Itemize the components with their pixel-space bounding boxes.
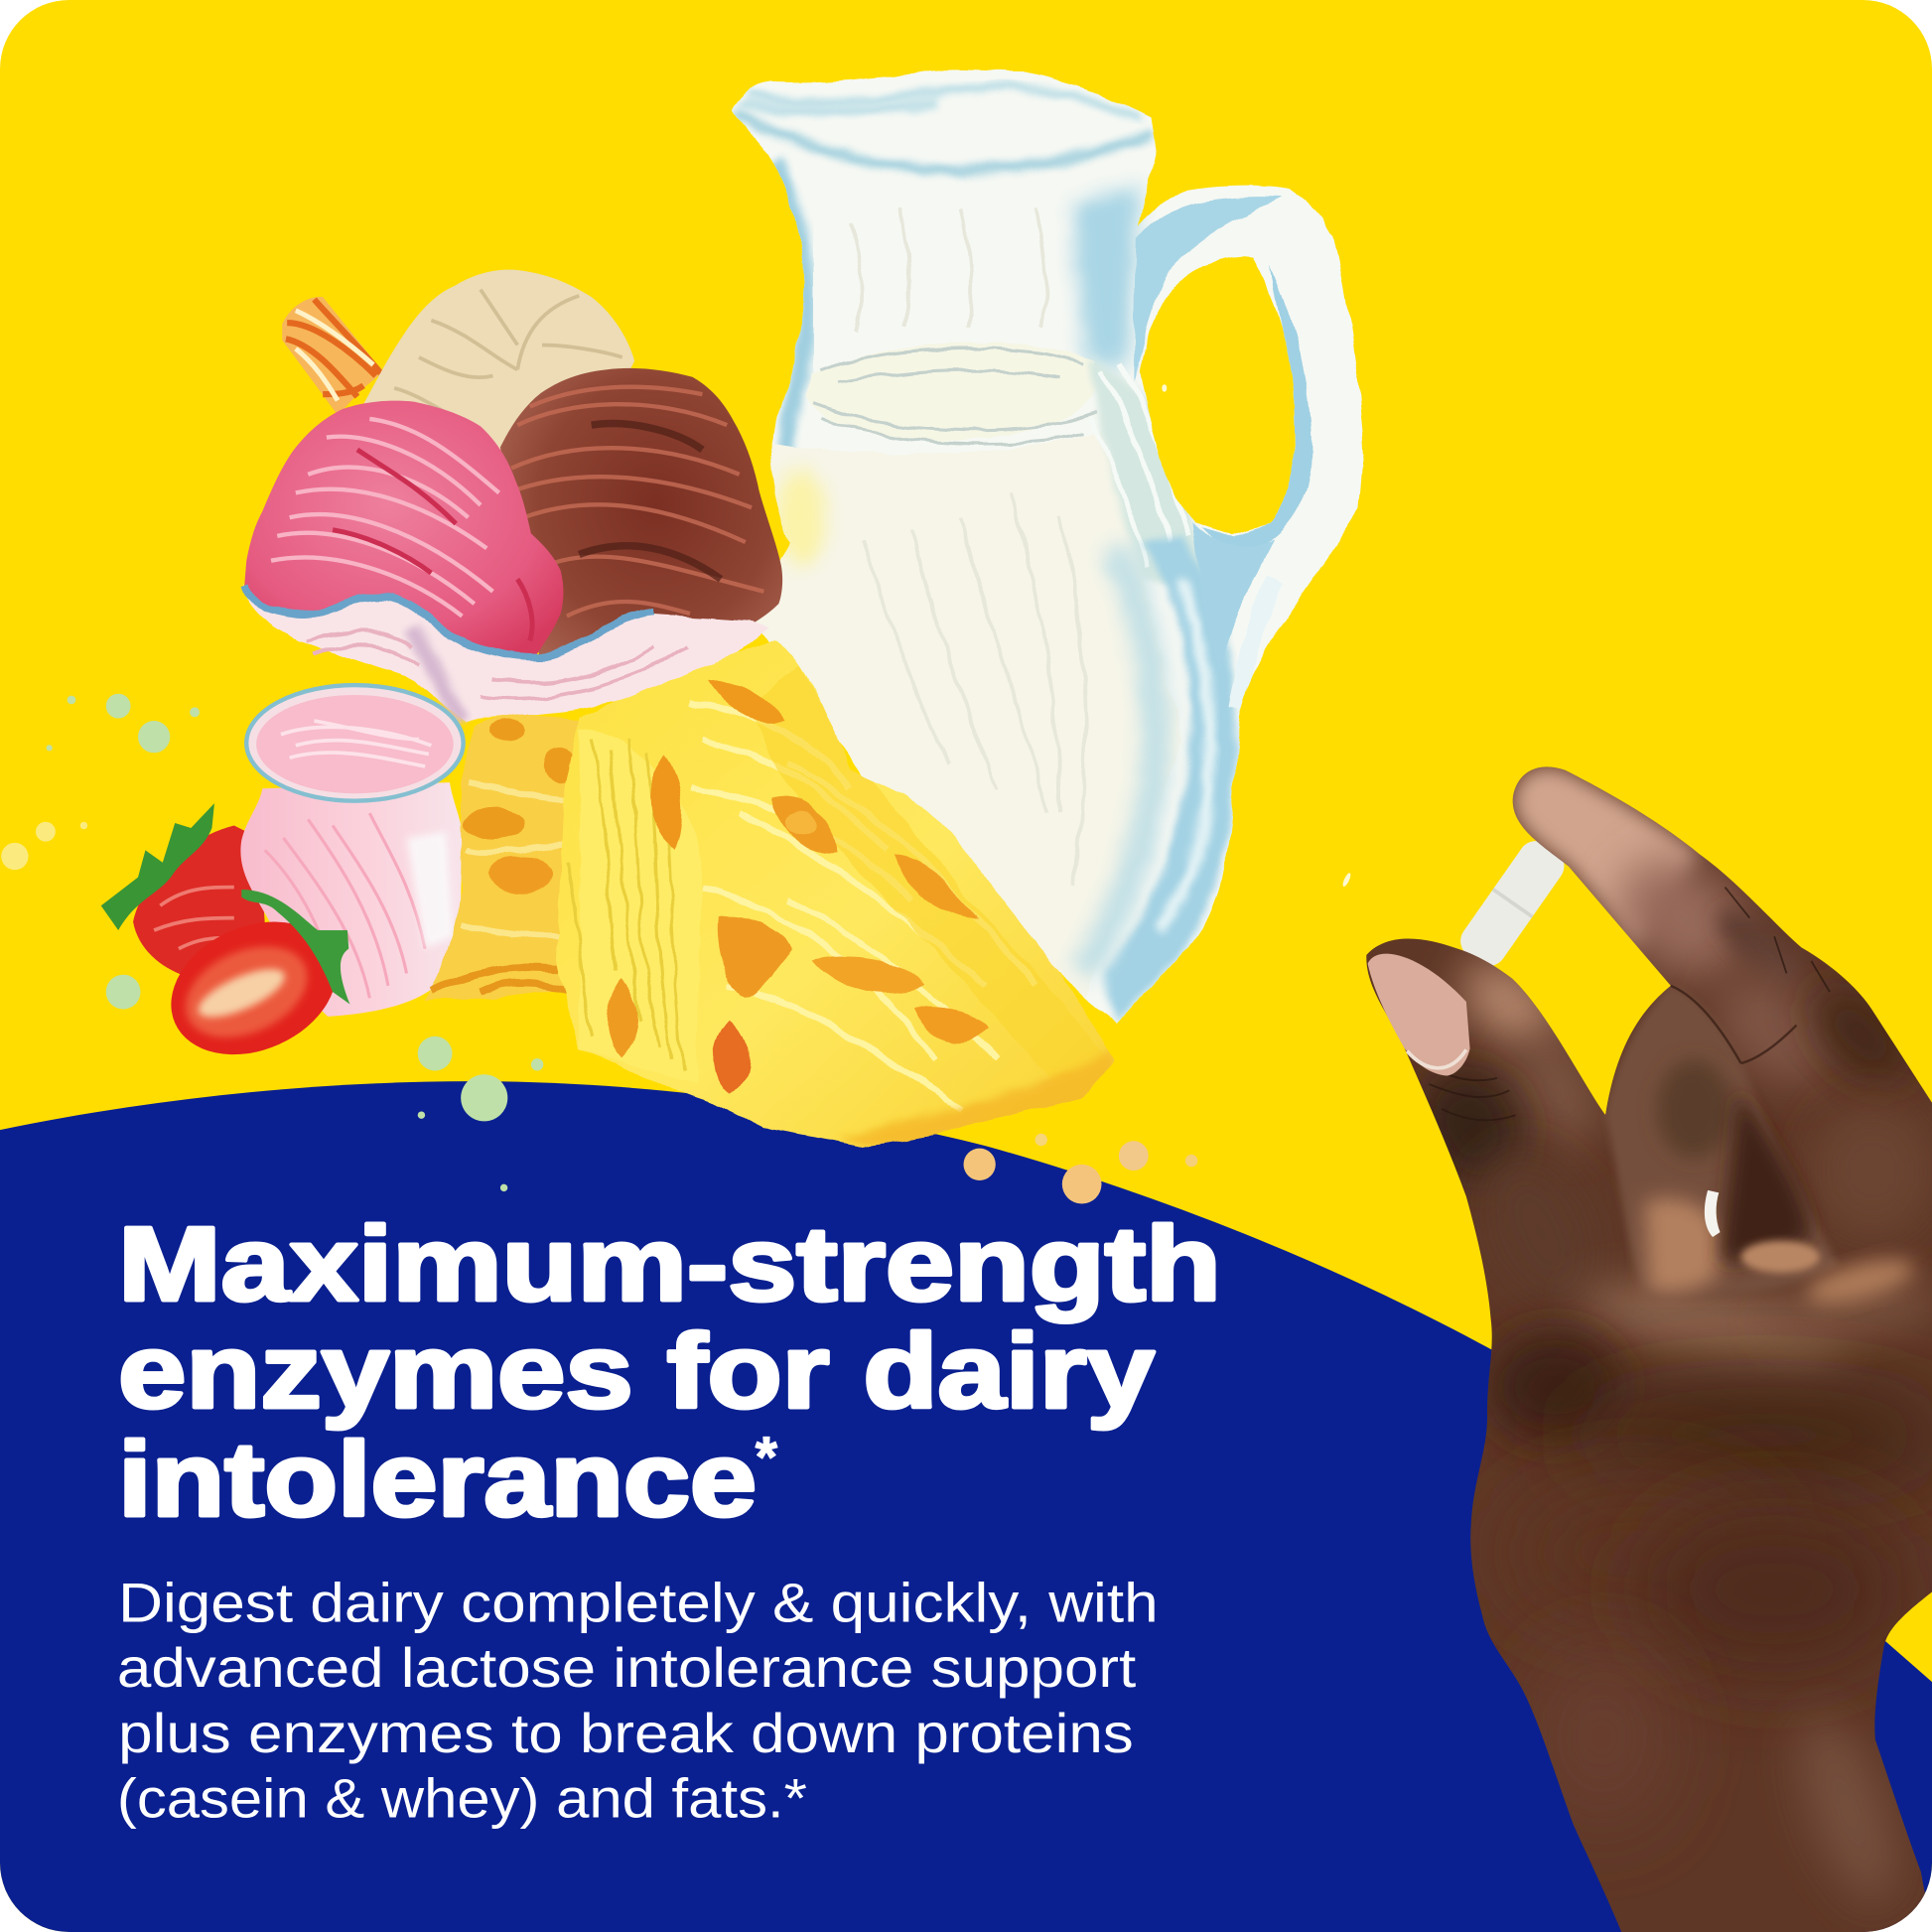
body text: advanced lactose intolerance support bbox=[117, 1636, 1137, 1699]
handle lower join bbox=[1192, 522, 1275, 651]
index finger tones bbox=[1513, 766, 1699, 949]
green droplets bbox=[47, 694, 543, 1191]
cheese crumbs bbox=[964, 1134, 1197, 1204]
palm ridge bbox=[1574, 1270, 1852, 1380]
illustration: yogurt jar bbox=[240, 685, 464, 1017]
jar rim bbox=[246, 685, 464, 801]
handle top-left blue bbox=[1134, 197, 1282, 382]
back of hand bbox=[1503, 1478, 1774, 1626]
navy wave panel bbox=[0, 1081, 1932, 1932]
illustration: milk jug bbox=[733, 69, 1364, 1024]
thumb tones bbox=[1447, 944, 1573, 1064]
jug lip bbox=[736, 113, 1152, 170]
illustration: ice cream bowl bbox=[241, 582, 770, 722]
body text: Digest dairy completely & quickly, with bbox=[118, 1571, 1159, 1633]
illustration: chocolate scoop bbox=[500, 368, 782, 671]
capsule bbox=[1453, 834, 1571, 973]
hand holding capsule bbox=[1343, 740, 1932, 1932]
illustration: front strawberry bbox=[171, 890, 349, 1054]
illustration: back cheese wedge bbox=[425, 715, 586, 1001]
thumbnail bbox=[1368, 954, 1470, 1075]
illustration: main cheese wedge bbox=[557, 640, 1115, 1152]
ring bbox=[1705, 1190, 1721, 1237]
illustration: back strawberry bbox=[101, 803, 265, 976]
curled fingers bbox=[1605, 986, 1839, 1300]
milk body bbox=[752, 431, 1182, 998]
swirl shoulder bbox=[1087, 359, 1199, 586]
handle inner blue bbox=[1201, 265, 1311, 557]
title: * bbox=[756, 1426, 778, 1489]
title: intolerance bbox=[118, 1423, 757, 1539]
illustration: ice cream wafer bbox=[282, 297, 383, 415]
title: Maximum-strength bbox=[118, 1206, 1221, 1322]
body blue band bbox=[1103, 536, 1236, 1024]
sparkles bbox=[1162, 384, 1352, 888]
title: enzymes for dairy bbox=[118, 1313, 1155, 1430]
milk surface bbox=[807, 343, 1098, 441]
illustration: strawberry scoop bbox=[244, 401, 563, 659]
jug neck left edge bbox=[776, 160, 807, 542]
jug neck right shading bbox=[1072, 185, 1140, 369]
hand bbox=[1343, 740, 1932, 1932]
finger crease bbox=[1671, 986, 1796, 1063]
illustration: vanilla scoop bbox=[363, 270, 634, 469]
title bbox=[118, 1206, 1221, 1539]
body text: plus enzymes to break down proteins bbox=[118, 1702, 1134, 1764]
body text bbox=[117, 1571, 1159, 1830]
body text: (casein & whey) and fats.* bbox=[117, 1767, 807, 1830]
yellow droplets bbox=[1, 822, 87, 870]
